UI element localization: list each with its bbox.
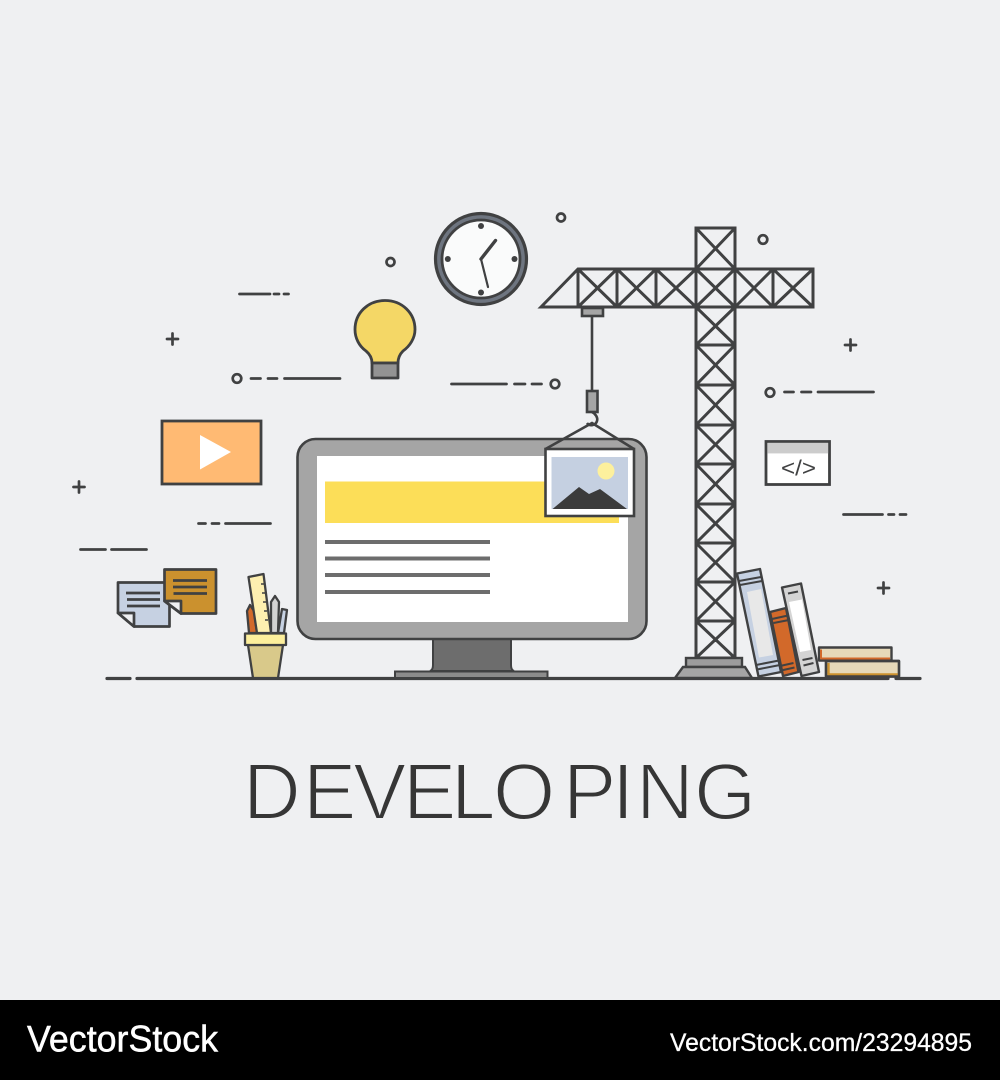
yellow banner [325, 482, 619, 523]
icon: wall clock [436, 214, 526, 304]
monitor body [298, 439, 646, 639]
icon: code window [766, 442, 830, 484]
decorative dashes, circles and plus marks [74, 214, 906, 594]
jib [541, 269, 813, 307]
icon: code window: </> [781, 456, 816, 480]
monitor stand [395, 639, 548, 678]
icon: light bulb [355, 300, 415, 378]
hanging picture [546, 449, 634, 516]
icon: pencil cup [245, 574, 287, 678]
crane base [675, 658, 752, 678]
text lines [325, 540, 490, 594]
ground line [107, 677, 920, 680]
books [737, 569, 899, 676]
monitor [298, 439, 646, 678]
footer image id: VectorStock.com/23294895 [670, 1029, 972, 1057]
title: DEVELOPING [243, 747, 756, 836]
monitor screen [317, 456, 628, 622]
icon: sticky notes [118, 570, 216, 626]
orange book [770, 608, 798, 676]
flat books [819, 648, 899, 676]
footer logo: VectorStock [27, 1018, 218, 1060]
mast [696, 228, 735, 658]
grey book [782, 584, 819, 676]
blue book [737, 569, 781, 676]
icon: video player [162, 421, 261, 484]
footer bar [0, 1000, 1000, 1080]
crane tower [541, 228, 813, 678]
crane hook and cable [546, 308, 634, 449]
